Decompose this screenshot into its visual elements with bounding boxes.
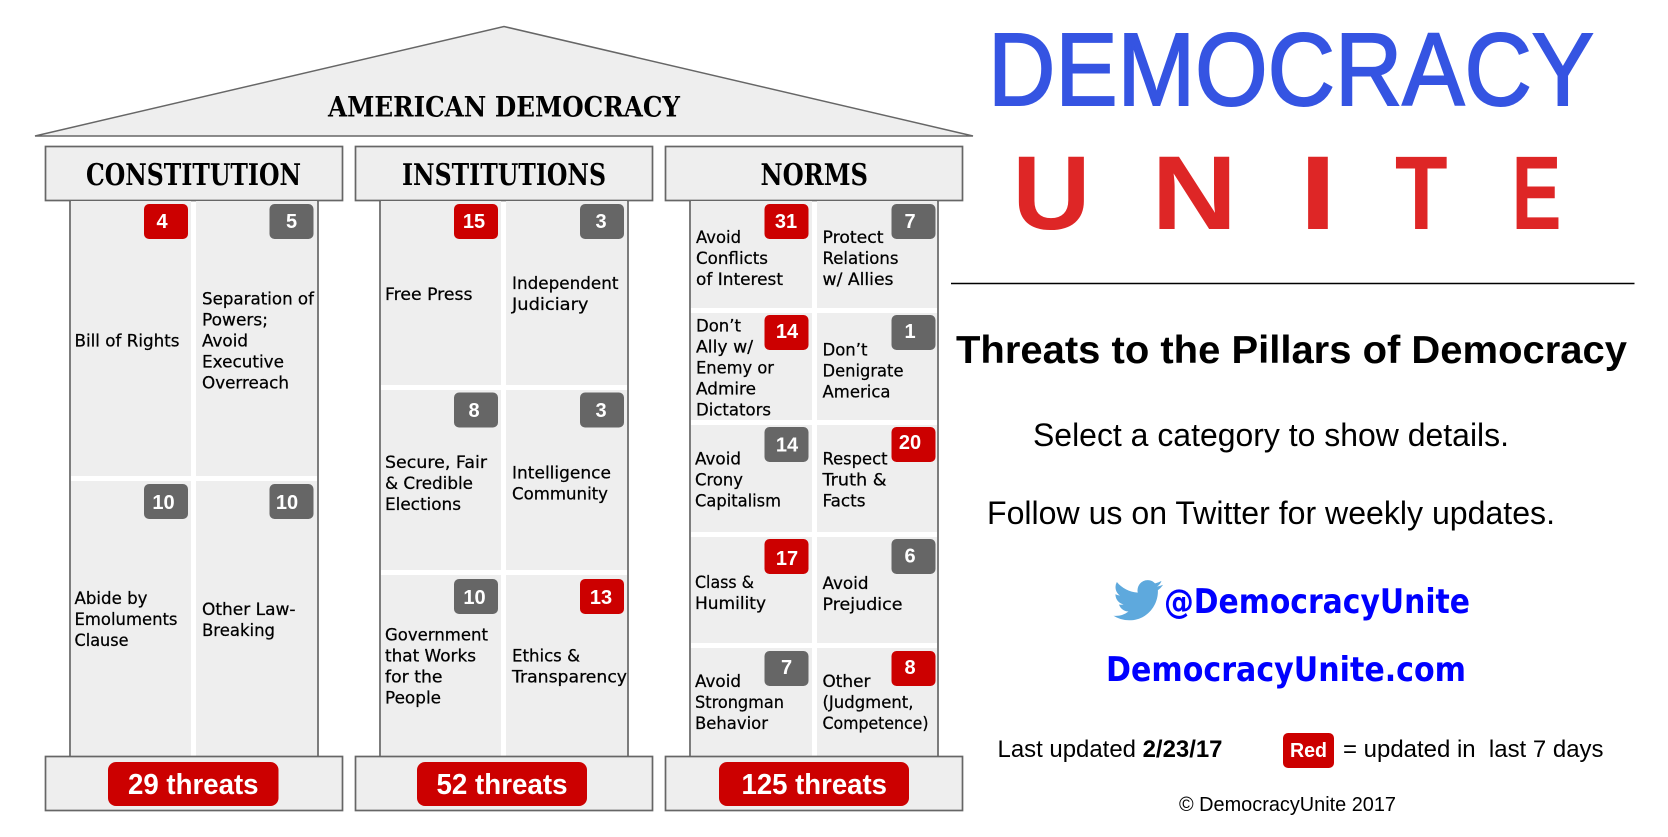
category: Ethics and Transparency: Transparency	[511, 668, 627, 688]
category: Government that Works for the People	[381, 575, 501, 756]
category: Bill of Rights	[71, 201, 191, 476]
category: Other (Judgment, Competence): 8	[904, 657, 916, 679]
category: Emoluments Clause: Emoluments	[74, 610, 178, 630]
pillar cap: Constitution	[46, 146, 342, 200]
category: Avoid Prejudice: 6	[904, 546, 916, 568]
pillar base: 52 threats: 52 threats	[436, 769, 568, 801]
website: DemocracyUnite.com	[1106, 650, 1466, 690]
category: Avoid Strongman Behavior: Strongman	[695, 693, 784, 713]
category: Don't Denigrate America: Don’t	[822, 340, 868, 360]
category: Other Law-Breaking: 10	[276, 492, 298, 514]
category: Separation of Powers: Executive	[202, 352, 284, 372]
category: Protect Relations with Allies	[817, 201, 937, 308]
pillar cap: Norms: NORMS	[760, 158, 868, 193]
category: Emoluments Clause: 10	[152, 492, 175, 514]
category: Other (Judgment, Competence)	[817, 648, 937, 756]
category: Secure, Fair and Credible Elections: Elections	[385, 495, 461, 515]
copyright: © DemocracyUnite 2017	[1179, 794, 1396, 816]
category: Avoid Strongman Behavior: Avoid	[695, 672, 741, 692]
category: Other Law-Breaking: Other Law-	[202, 600, 296, 620]
category: Separation of Powers: 5	[286, 211, 297, 233]
category: Government that Works for the People: that Works	[385, 646, 476, 666]
category: Avoid Strongman Behavior: Behavior	[695, 714, 768, 734]
category: Independent Judiciary: Judiciary	[511, 295, 588, 315]
text: follow on Twitter: Follow us on Twitter for weekly updates.	[987, 495, 1555, 531]
category: Secure, Fair and Credible Elections: & Credible	[385, 474, 473, 494]
category: Respect Truth and Facts	[817, 425, 937, 532]
category: Don't Ally with Enemy or Admire Dictators: Ally w/	[696, 338, 753, 358]
pillar: Constitution	[46, 146, 342, 810]
category: Avoid Crony Capitalism: Crony	[695, 470, 743, 490]
category: Avoid Conflicts of Interest: Conflicts	[696, 249, 768, 269]
category: Protect Relations with Allies: Protect	[822, 228, 884, 248]
category: Avoid Crony Capitalism: Capitalism	[695, 492, 781, 512]
category: Avoid Crony Capitalism: 14	[776, 434, 799, 456]
category: Bill of Rights: 4	[156, 211, 168, 233]
pillar cap: Constitution: CONSTITUTION	[86, 158, 301, 193]
category: Other Law-Breaking	[196, 481, 317, 756]
category: Free Press: 15	[463, 211, 485, 233]
category: Don't Denigrate America: 1	[904, 321, 916, 343]
category: Ethics and Transparency: Ethics &	[512, 646, 580, 666]
last updated date: Last updated 2/23/17	[998, 736, 1222, 763]
legend: red badge	[1283, 733, 1334, 768]
category: Avoid Conflicts of Interest: of Interest	[696, 270, 783, 290]
category: Avoid Prejudice: Avoid	[822, 574, 868, 594]
legend text: = updated in last 7 days	[1343, 736, 1604, 763]
category: Separation of Powers: Avoid	[202, 332, 248, 352]
category: Emoluments Clause: Abide by	[74, 589, 148, 609]
logo: Democracy Unite: DEMOCRACY	[988, 12, 1594, 127]
category: Other (Judgment, Competence): Competence)	[822, 714, 928, 734]
pillar cap: Institutions	[356, 146, 652, 200]
category: Free Press: Free Press	[385, 285, 473, 305]
category: Separation of Powers: Powers;	[202, 310, 268, 330]
roof: American Democracy: AMERICAN DEMOCRACY	[327, 90, 681, 124]
logo: Democracy Unite: I	[1299, 134, 1337, 251]
logo: Democracy Unite: N	[1152, 134, 1237, 251]
category: Avoid Crony Capitalism	[691, 425, 812, 532]
category: Independent Judiciary: Independent	[512, 274, 619, 294]
pillar base: 125 threats	[666, 756, 962, 810]
category: Ethics and Transparency	[506, 575, 627, 756]
category: Don't Denigrate America	[817, 313, 937, 420]
category: Government that Works for the People: for the	[385, 668, 442, 688]
heading: Threats to the Pillars of Democracy: Threats to the Pillars of Democracy	[956, 329, 1627, 372]
category: Avoid Strongman Behavior: 7	[781, 657, 792, 679]
category: Class and Humility: Humility	[695, 594, 766, 614]
icon: Twitter bird	[1114, 580, 1163, 620]
category: Secure, Fair and Credible Elections: Secure, Fair	[385, 453, 487, 473]
category: Free Press	[381, 201, 501, 385]
category: Avoid Crony Capitalism: Avoid	[695, 450, 741, 470]
category: Separation of Powers: Overreach	[202, 374, 289, 394]
category: Protect Relations with Allies: Relations	[822, 249, 899, 269]
pillar base: 125 threats: 125 threats	[742, 769, 887, 801]
category: Emoluments Clause: Clause	[74, 631, 128, 651]
category: Protect Relations with Allies: 7	[904, 211, 916, 233]
category: Don't Ally with Enemy or Admire Dictators: Enemy or	[696, 358, 774, 378]
pillar base: 29 threats: 29 threats	[128, 769, 258, 801]
category: Don't Ally with Enemy or Admire Dictators: Dictators	[696, 400, 771, 420]
category: Secure, Fair and Credible Elections: 8	[468, 400, 480, 422]
category: Government that Works for the People: Government	[385, 626, 488, 646]
category: Don't Ally with Enemy or Admire Dictators: Admire	[696, 380, 756, 400]
logo: Democracy Unite	[988, 12, 1594, 252]
pillar base: 52 threats	[356, 756, 652, 810]
category: Other (Judgment, Competence): Other	[822, 672, 870, 692]
category: Intelligence Community	[506, 390, 627, 570]
category: Emoluments Clause	[71, 481, 191, 756]
pillar cap: Institutions: INSTITUTIONS	[402, 158, 606, 193]
category: Avoid Conflicts of Interest: 31	[775, 211, 797, 233]
category: Don't Ally with Enemy or Admire Dictators	[691, 313, 812, 420]
category: Protect Relations with Allies: w/ Allies	[822, 270, 894, 290]
category: Government that Works for the People: 10	[463, 587, 486, 609]
category: Class and Humility: 17	[776, 548, 798, 570]
logo: Democracy Unite: E	[1512, 136, 1561, 252]
category: Intelligence Community: 3	[595, 400, 607, 422]
category: Respect Truth and Facts: Facts	[822, 492, 866, 512]
category: Avoid Prejudice	[817, 537, 937, 643]
category: Ethics and Transparency: 13	[590, 587, 612, 609]
pillar base: 29 threats	[46, 756, 342, 810]
category: Separation of Powers: Separation of	[202, 290, 315, 310]
category: Don't Denigrate America: America	[822, 382, 890, 402]
category: Secure, Fair and Credible Elections	[381, 390, 501, 570]
category: Avoid Strongman Behavior	[691, 648, 812, 756]
category: Other (Judgment, Competence): (Judgment,	[822, 693, 914, 713]
category: Class and Humility	[691, 537, 812, 643]
category: Respect Truth and Facts: Respect	[822, 450, 888, 470]
category: Avoid Prejudice: Prejudice	[822, 595, 902, 615]
category: Separation of Powers	[196, 201, 317, 476]
logo: Democracy Unite: T	[1395, 135, 1448, 252]
category: Government that Works for the People: People	[385, 688, 441, 708]
category: Avoid Conflicts of Interest: Avoid	[696, 228, 741, 248]
category: Don't Ally with Enemy or Admire Dictators: 14	[776, 321, 799, 343]
category: Don't Denigrate America: Denigrate	[822, 362, 904, 382]
category: Don't Ally with Enemy or Admire Dictators: Don’t	[696, 316, 741, 336]
category: Avoid Conflicts of Interest	[691, 201, 812, 308]
category: Other Law-Breaking: Breaking	[202, 621, 275, 641]
text: select a category: Select a category to show details.	[1033, 417, 1509, 453]
category: Bill of Rights: Bill of Rights	[74, 332, 180, 352]
category: Respect Truth and Facts: Truth &	[821, 470, 886, 490]
pillar: Norms	[666, 146, 962, 810]
pillar: Institutions	[356, 146, 652, 810]
category: Independent Judiciary: 3	[595, 211, 607, 233]
category: Respect Truth and Facts: 20	[899, 432, 921, 454]
legend: red badge: Red	[1290, 740, 1327, 762]
roof: American Democracy	[35, 26, 973, 136]
category: Intelligence Community: Community	[512, 484, 608, 504]
pillar cap: Norms	[666, 146, 962, 200]
category: Independent Judiciary	[506, 201, 627, 385]
category: Class and Humility: Class &	[695, 573, 754, 593]
category: Intelligence Community: Intelligence	[512, 464, 611, 484]
logo: Democracy Unite: U	[1012, 134, 1090, 252]
Twitter handle: @DemocracyUnite	[1164, 582, 1470, 622]
